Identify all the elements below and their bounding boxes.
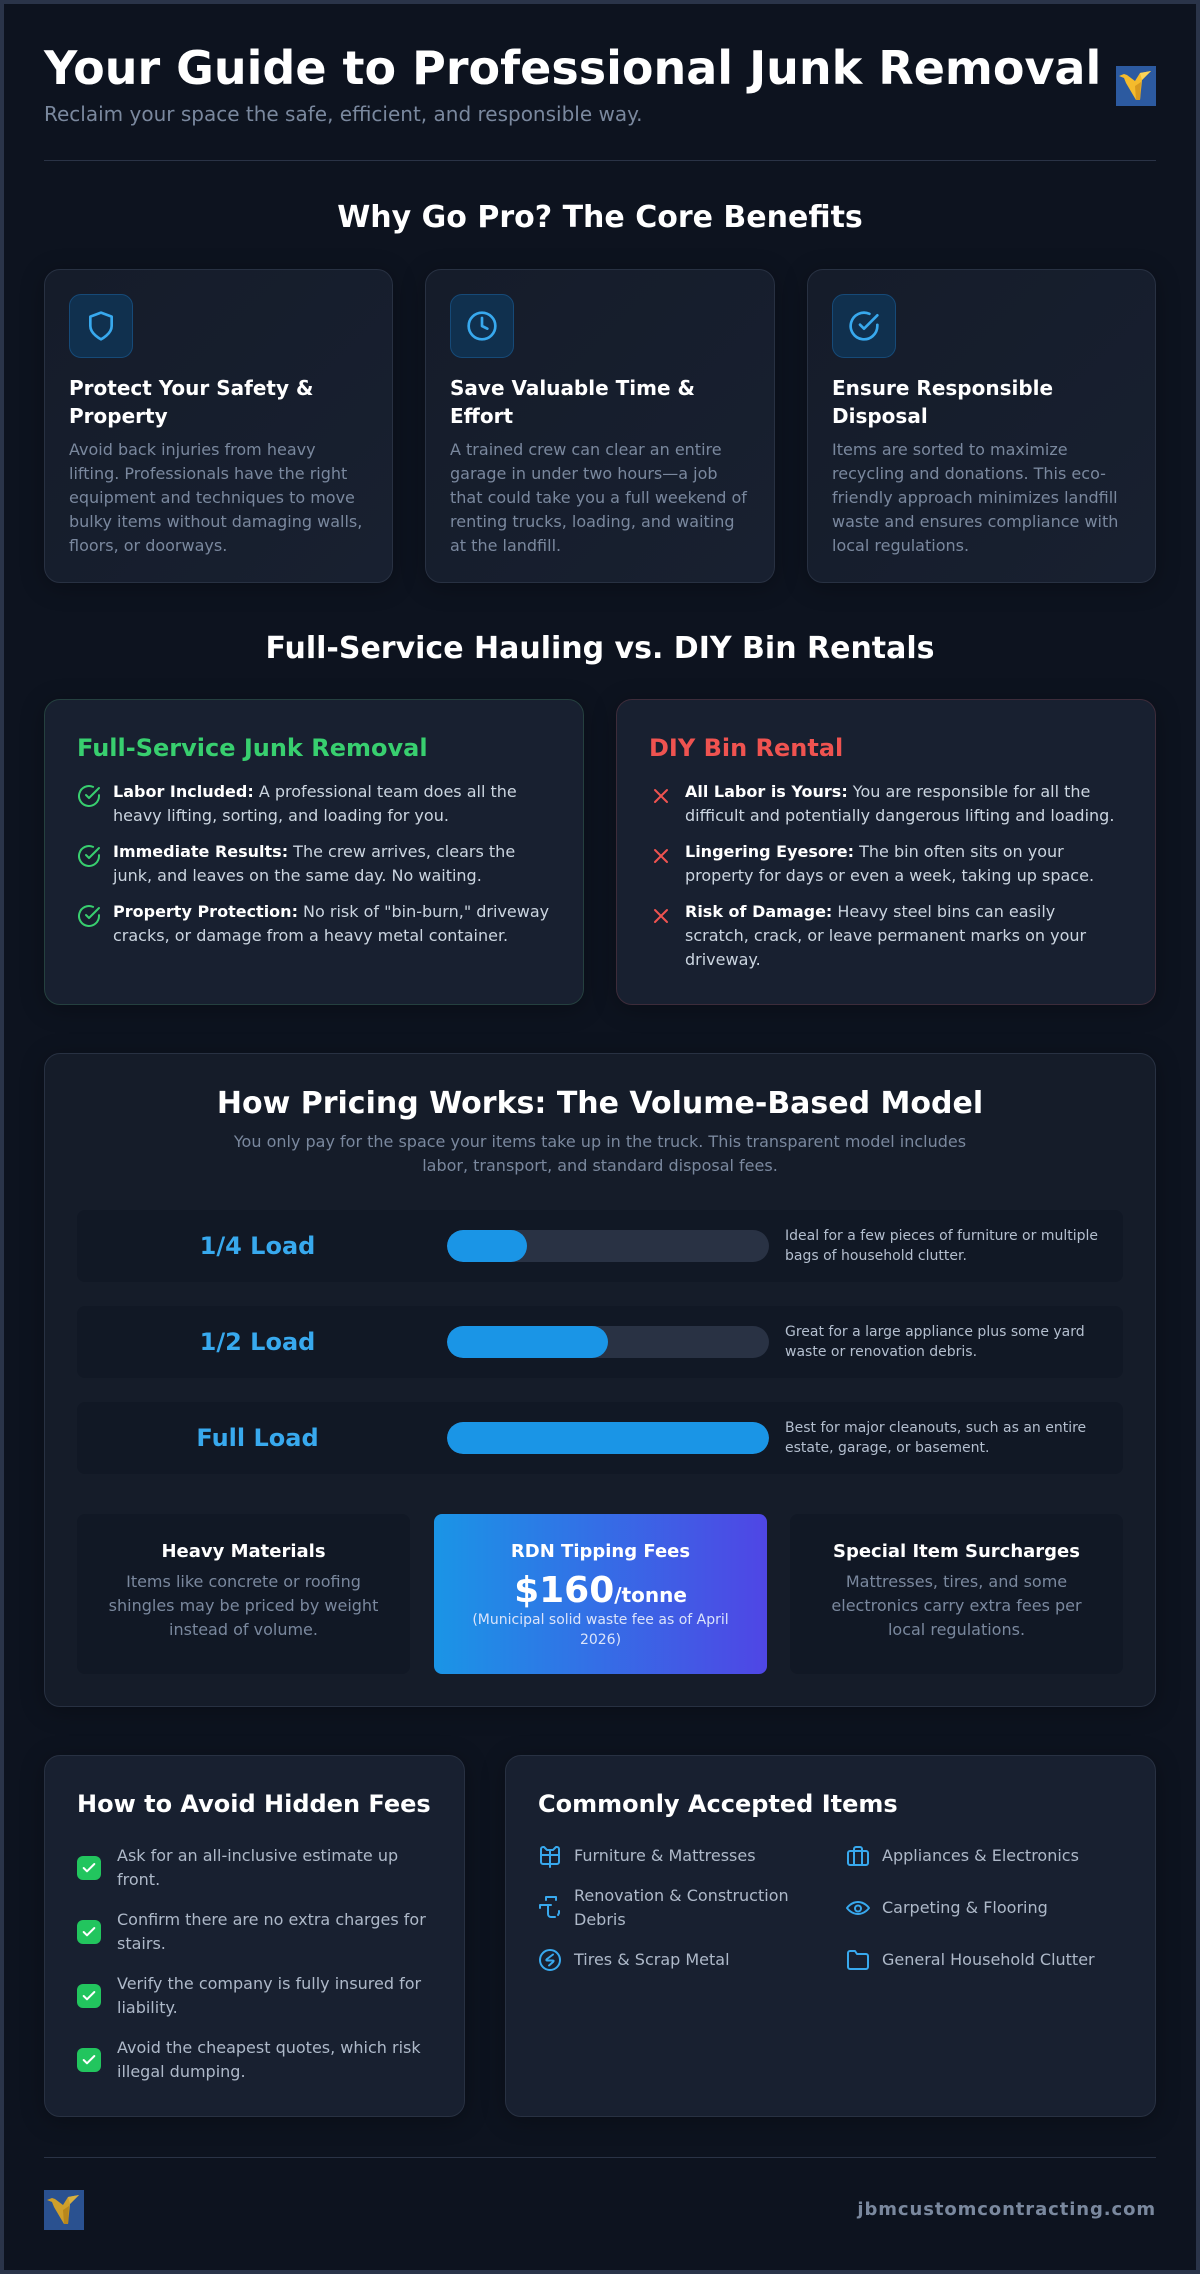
panel: time benefit xyxy=(425,269,775,583)
card heading xyxy=(450,376,695,428)
icon: check 3 xyxy=(78,905,100,927)
card heading: Disposal xyxy=(832,404,928,428)
item label: Carpeting & Flooring xyxy=(882,1898,1048,1917)
list item: junk, and leaves on the same day. No waiting. xyxy=(113,866,482,885)
panel heading: Full-Service Junk Removal xyxy=(77,734,428,762)
list item: Labor Included: A professional team does all the xyxy=(113,782,517,801)
note: (Municipal solid waste fee as of April xyxy=(472,1612,729,1628)
load description: Great for a large appliance plus some yard xyxy=(785,1324,1085,1340)
icon: cross 2 xyxy=(654,849,668,863)
progress bar 25% xyxy=(447,1230,769,1262)
item: clutter xyxy=(846,1948,1122,1972)
list item xyxy=(685,842,1094,885)
icon: green check xyxy=(77,1856,101,1880)
load description: estate, garage, or basement. xyxy=(785,1440,989,1456)
item label: Furniture & Mattresses xyxy=(574,1846,756,1865)
tip text xyxy=(117,1846,398,1889)
card text: friendly approach minimizes landfill xyxy=(832,488,1118,507)
load label: 1/4 Load xyxy=(200,1232,315,1260)
header xyxy=(44,41,1156,126)
progress bar 100% xyxy=(447,1422,769,1454)
card text: waste and ensures compliance with xyxy=(832,512,1118,531)
load description: bags of household clutter. xyxy=(785,1248,967,1264)
tip text: Verify the company is fully insured for xyxy=(117,1974,421,1993)
load description xyxy=(785,1228,1098,1264)
list item xyxy=(113,782,517,825)
icon: green check xyxy=(77,2048,101,2072)
panel: DIY bin xyxy=(616,699,1156,1005)
tip text: front. xyxy=(117,1870,160,1889)
list item: Risk of Damage: Heavy steel bins can easily xyxy=(685,902,1055,921)
icon: check 2 xyxy=(78,845,100,867)
load label: Full Load xyxy=(196,1424,319,1452)
icon: cross 3 xyxy=(654,909,668,923)
tip text: Confirm there are no extra charges for xyxy=(117,1910,426,1929)
card text: at the landfill. xyxy=(450,536,561,555)
icon: footer logo xyxy=(44,2190,84,2230)
panel: pricing xyxy=(44,1053,1156,1707)
icon: check circle xyxy=(832,294,896,358)
list item: Lingering Eyesore: The bin often sits on your xyxy=(685,842,1064,861)
load description xyxy=(785,1324,1085,1360)
box text: instead of volume. xyxy=(169,1620,318,1639)
tip 1 xyxy=(77,1846,398,1889)
tip text: Avoid the cheapest quotes, which risk xyxy=(117,2038,421,2057)
item: renovation xyxy=(538,1884,814,1932)
fee box: surcharges xyxy=(790,1514,1123,1674)
item: tires xyxy=(538,1948,814,1972)
icon: logo xyxy=(1116,66,1156,106)
card text: lifting. Professionals have the right xyxy=(69,464,347,483)
list item xyxy=(685,782,1114,825)
card heading: Ensure Responsible xyxy=(832,376,1053,400)
item: carpeting xyxy=(846,1896,1122,1920)
icon: tire xyxy=(538,1948,562,1972)
card text: recycling and donations. This eco- xyxy=(832,464,1106,483)
load row: half xyxy=(77,1306,1123,1378)
load label: 1/2 Load xyxy=(200,1328,315,1356)
panel: disposal benefit xyxy=(807,269,1156,583)
load row: quarter xyxy=(77,1210,1123,1282)
box text: shingles may be priced by weight xyxy=(109,1596,378,1615)
card text: renting trucks, loading, and waiting xyxy=(450,512,735,531)
card text: that could take you a full weekend of xyxy=(450,488,747,507)
panel heading: DIY Bin Rental xyxy=(649,734,843,762)
list item: Property Protection: No risk of "bin-burn," driveway xyxy=(113,902,549,921)
panel heading: Commonly Accepted Items xyxy=(538,1790,898,1818)
fee box: tipping fees xyxy=(434,1514,767,1674)
item: appliances xyxy=(847,1846,1079,1866)
card text: local regulations. xyxy=(832,536,969,555)
panel: hidden fees xyxy=(44,1755,465,2117)
item label: Tires & Scrap Metal xyxy=(574,1950,730,1969)
icon: appliance xyxy=(847,1846,869,1866)
tip text: stairs. xyxy=(117,1934,166,1953)
subtitle: Reclaim your space the safe, efficient, and responsible way. xyxy=(44,102,642,126)
card text: garage in under two hours—a job xyxy=(450,464,718,483)
icon: furniture xyxy=(540,1846,560,1868)
icon: shield xyxy=(69,294,133,358)
card heading xyxy=(832,376,1053,428)
box heading: Special Item Surcharges xyxy=(833,1541,1080,1562)
card heading: Property xyxy=(69,404,168,428)
title: Your Guide to Professional Junk Removal xyxy=(44,41,1101,95)
heading: core benefits: Why Go Pro? The Core Benefits xyxy=(337,200,863,235)
tip text: illegal dumping. xyxy=(117,2062,246,2081)
card text: equipment and techniques to move xyxy=(69,488,355,507)
list item: cracks, or damage from a heavy metal container. xyxy=(113,926,508,945)
icon: check 1 xyxy=(78,785,100,807)
box text xyxy=(831,1572,1082,1639)
list item xyxy=(685,902,1086,969)
load description: waste or renovation debris. xyxy=(785,1344,977,1360)
panel: accepted items xyxy=(505,1755,1156,2117)
card heading xyxy=(69,376,313,428)
icon: green check xyxy=(77,1984,101,2008)
card text: bulky items without damaging walls, xyxy=(69,512,362,531)
list item: heavy lifting, sorting, and loading for you. xyxy=(113,806,449,825)
card text: A trained crew can clear an entire xyxy=(450,440,722,459)
icon: green check xyxy=(77,1920,101,1944)
panel: full-service xyxy=(44,699,584,1005)
note: 2026) xyxy=(580,1632,621,1648)
box text: local regulations. xyxy=(888,1620,1025,1639)
item label: Debris xyxy=(574,1910,626,1929)
note xyxy=(472,1612,729,1648)
card heading: Protect Your Safety & xyxy=(69,376,313,400)
tip text xyxy=(117,2038,421,2081)
icon: renovation xyxy=(538,1896,562,1920)
panel: safety benefit xyxy=(44,269,393,583)
card heading: Effort xyxy=(450,404,513,428)
price: $160/tonne xyxy=(514,1570,687,1611)
list item: driveway. xyxy=(685,950,761,969)
tip text: liability. xyxy=(117,1998,178,2017)
card text xyxy=(450,440,748,555)
box text xyxy=(109,1572,378,1639)
list item xyxy=(113,902,549,945)
icon: eye xyxy=(846,1896,870,1920)
website: jbmcustomcontracting.com xyxy=(857,2199,1156,2220)
tip 3 xyxy=(77,1974,422,2017)
load description: Ideal for a few pieces of furniture or multiple xyxy=(785,1228,1098,1244)
list item: property for days or even a week, taking up space. xyxy=(685,866,1094,885)
progress bar 50% xyxy=(447,1326,769,1358)
tip 2 xyxy=(77,1910,426,1953)
list item: difficult and potentially dangerous lifting and loading. xyxy=(685,806,1114,825)
tip text: Ask for an all-inclusive estimate up xyxy=(117,1846,398,1865)
box heading: RDN Tipping Fees xyxy=(511,1541,690,1562)
icon: folder xyxy=(846,1948,870,1972)
icon: cross 1 xyxy=(654,789,668,803)
box text: Mattresses, tires, and some xyxy=(846,1572,1067,1591)
box text: Items like concrete or roofing xyxy=(126,1572,361,1591)
list item xyxy=(112,842,515,885)
pricing intro xyxy=(234,1132,966,1175)
item: furniture xyxy=(540,1846,756,1868)
card text: floors, or doorways. xyxy=(69,536,227,555)
card text xyxy=(69,440,362,555)
tip text xyxy=(117,1910,426,1953)
item label: Renovation & Construction xyxy=(574,1886,789,1905)
box heading: Heavy Materials xyxy=(161,1541,326,1562)
card text xyxy=(832,440,1118,555)
card heading: Save Valuable Time & xyxy=(450,376,695,400)
fee box: heavy materials xyxy=(77,1514,410,1674)
item label: Appliances & Electronics xyxy=(882,1846,1079,1865)
panel heading: How to Avoid Hidden Fees xyxy=(77,1790,431,1818)
item label: General Household Clutter xyxy=(882,1950,1095,1969)
card text: Avoid back injuries from heavy xyxy=(69,440,316,459)
pricing heading: How Pricing Works: The Volume-Based Model xyxy=(217,1086,983,1121)
list item: All Labor is Yours: You are responsible for all the xyxy=(685,782,1090,801)
list item: Immediate Results: The crew arrives, clears the xyxy=(113,842,515,861)
load description xyxy=(785,1420,1086,1456)
icon: clock xyxy=(450,294,514,358)
heading: comparison: Full-Service Hauling vs. DIY Bin Rentals xyxy=(265,631,935,666)
pricing intro: labor, transport, and standard disposal fees. xyxy=(422,1156,778,1175)
footer xyxy=(44,2190,1156,2230)
load row: full xyxy=(77,1402,1123,1474)
box text: electronics carry extra fees per xyxy=(831,1596,1082,1615)
pricing intro: You only pay for the space your items take up in the truck. This transparent model includes xyxy=(234,1132,966,1151)
tip text xyxy=(117,1974,422,2017)
card text: Items are sorted to maximize xyxy=(832,440,1068,459)
list item: scratch, crack, or leave permanent marks on your xyxy=(685,926,1086,945)
item label xyxy=(574,1884,789,1932)
load description: Best for major cleanouts, such as an entire xyxy=(785,1420,1086,1436)
tip 4 xyxy=(77,2038,421,2081)
